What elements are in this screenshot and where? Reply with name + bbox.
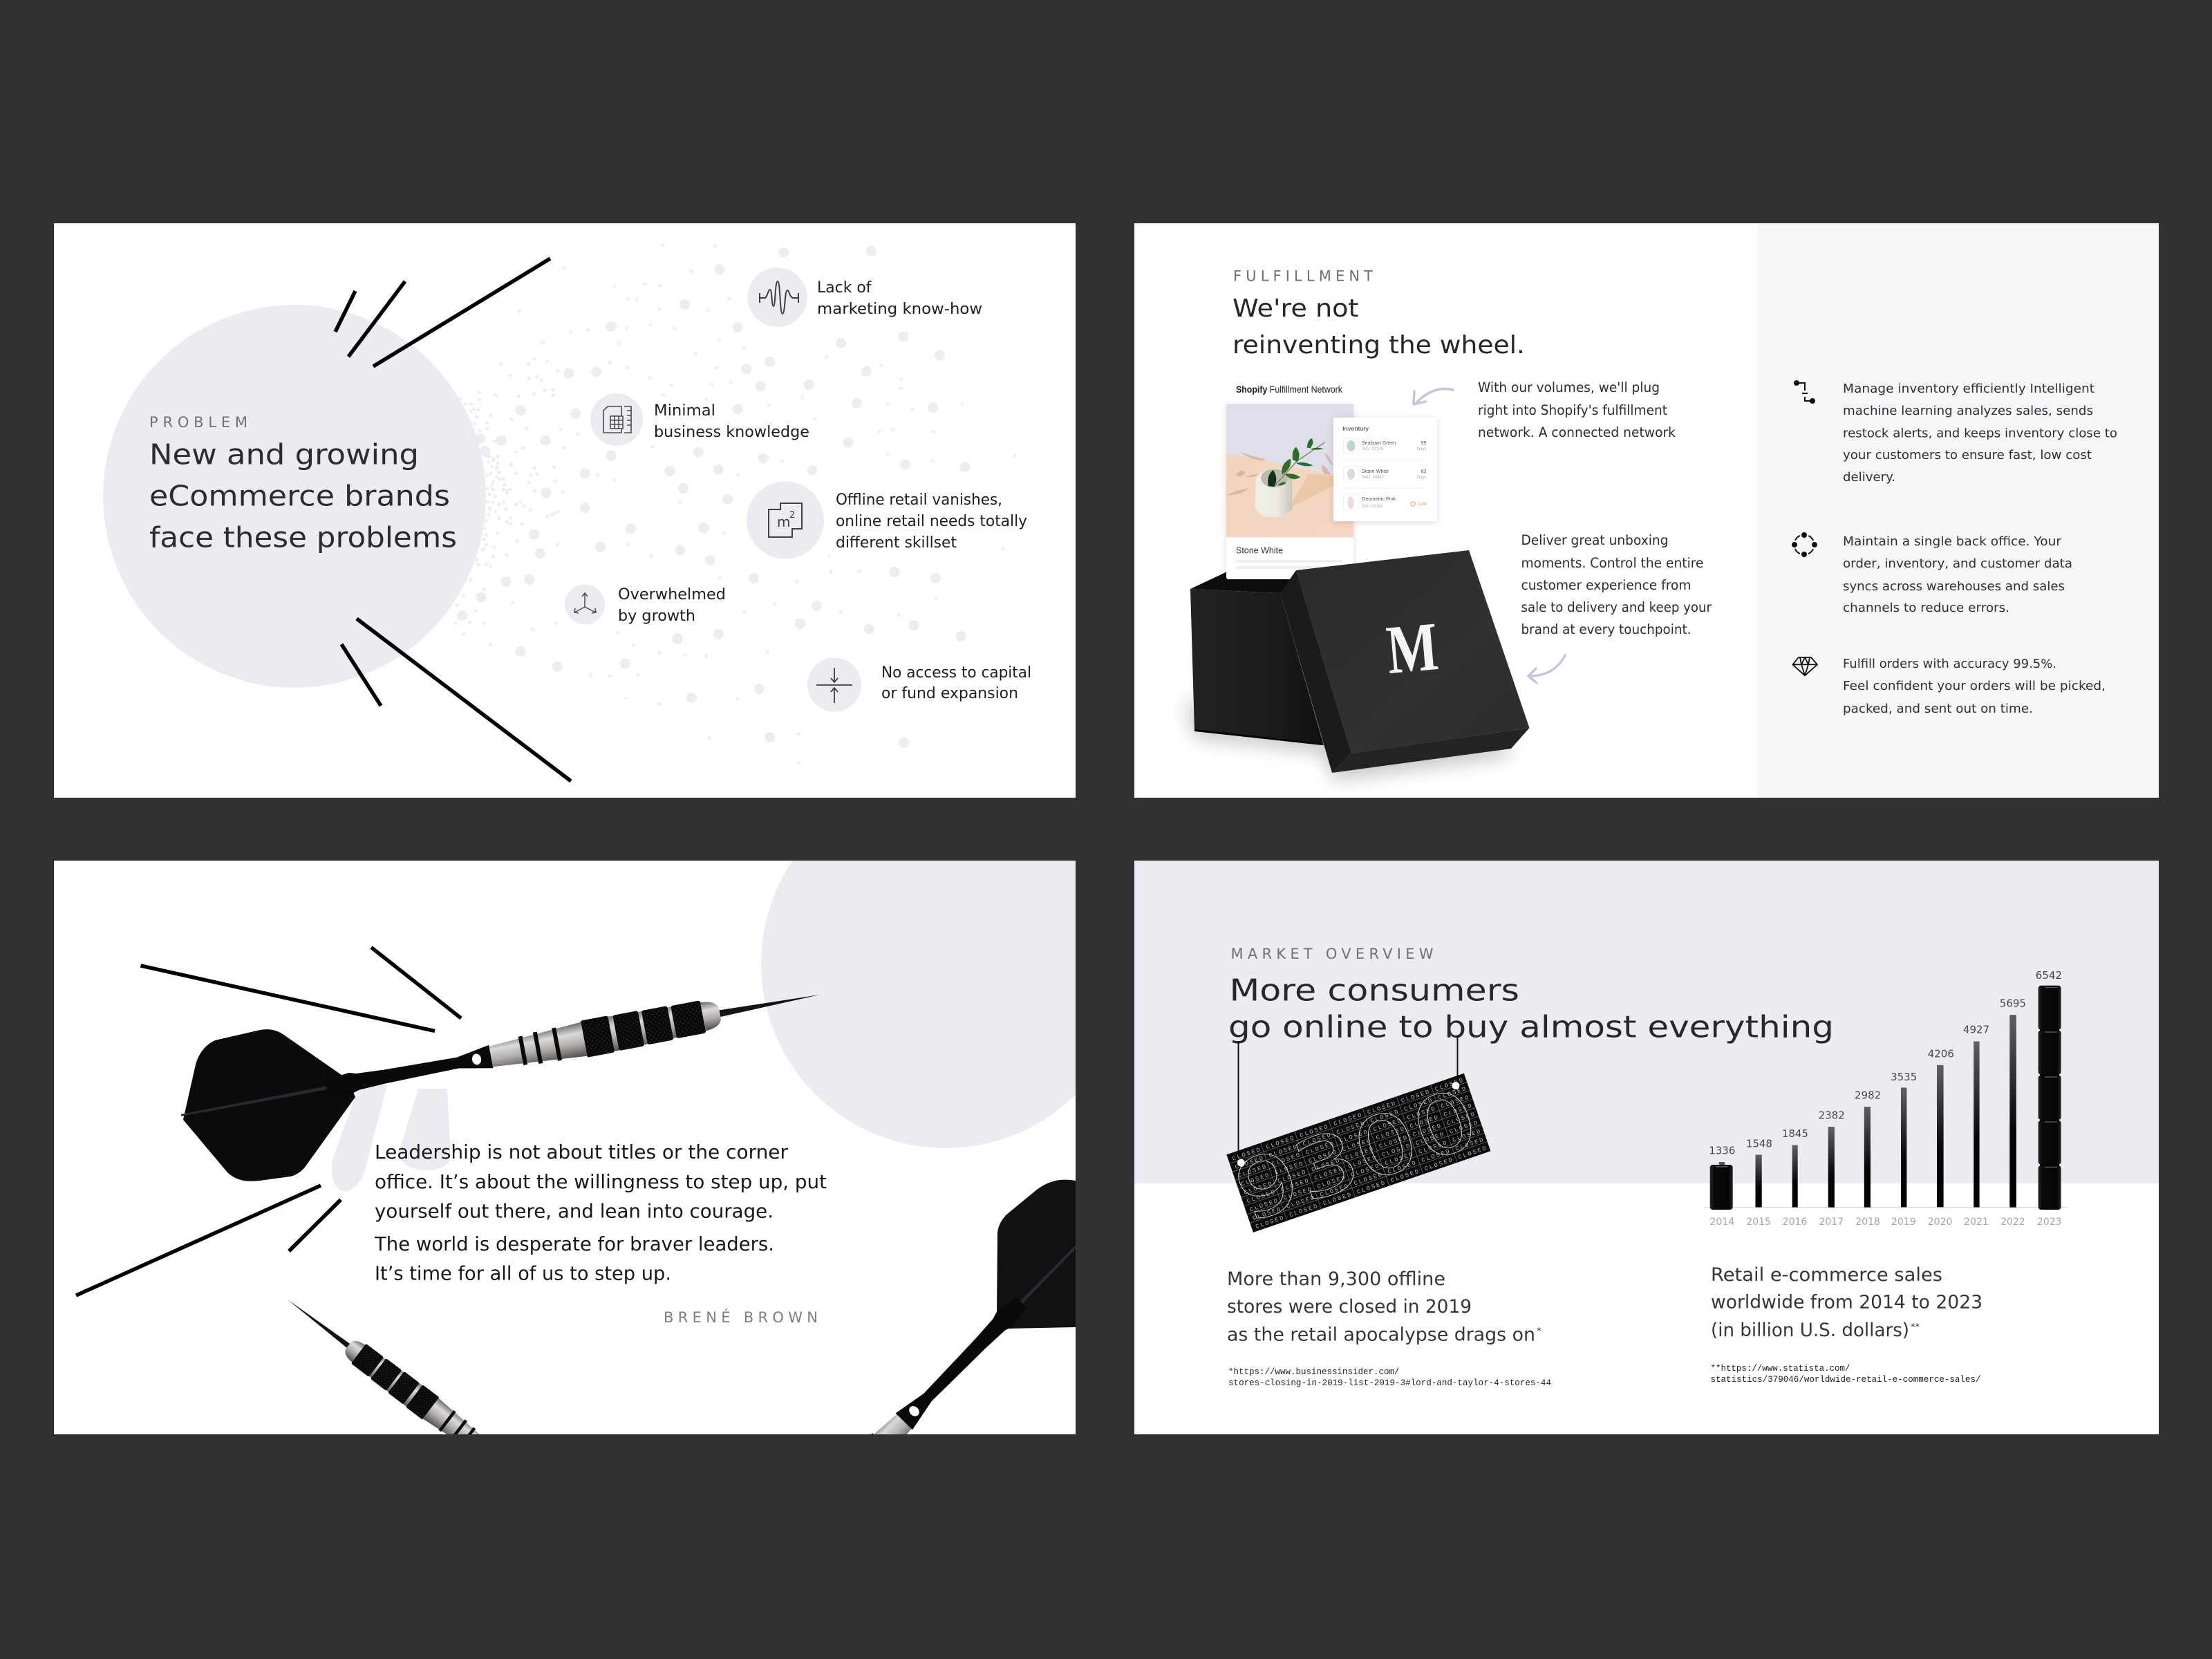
heading: market overview: More consumers: [1229, 973, 1519, 1008]
value labels: 1336: [1709, 1145, 1735, 1157]
text: stores closed: stores were closed in 2019: [1227, 1296, 1472, 1318]
text: deliver great unboxing: sale to delivery and keep your: [1521, 599, 1712, 615]
row: geometric pink: SKU: 03154: [1362, 505, 1383, 509]
year labels: [1709, 1217, 2062, 1228]
hanging strings: [1239, 1035, 1457, 1161]
heading: problem: New and growing: [149, 438, 419, 471]
value labels: 4927: [1963, 1024, 1989, 1036]
value labels: [1709, 969, 2062, 1157]
item: lack of marketing know-how: Lack of: [817, 279, 872, 297]
row: geometric pink: Geometric Pink: [1362, 497, 1396, 502]
text: retail sales: Retail e-commerce sales: [1711, 1264, 1942, 1286]
sign: 9300 closed stores: CLOSED CLOSED CLOSED CLOSED CLOSED CLOSED CLOSED: [1255, 1145, 1487, 1230]
dart: main: [178, 976, 823, 1181]
icon: calculator: [603, 406, 631, 433]
quote text: Leadership is not about titles or the corner: [375, 1141, 789, 1163]
value labels: 2382: [1819, 1109, 1845, 1122]
row: seafoam green: Days: [1417, 447, 1427, 451]
heading: market overview: go online to buy almost everything: [1228, 1009, 1834, 1045]
heading: problem: eCommerce brands: [149, 480, 450, 513]
box interior: [1190, 568, 1300, 593]
year labels: 2016: [1783, 1217, 1807, 1228]
text: deliver great unboxing: [1521, 532, 1712, 637]
quote author: BRENÉ BROWN: [664, 1309, 818, 1326]
feature: inventory: your customers to ensure fast, low cost: [1843, 448, 2092, 462]
footnote: statista: **https://www.statista.com/: [1710, 1364, 1850, 1374]
text: with our volumes: With our volumes, we'll plug: [1478, 379, 1660, 395]
sign: 9300 closed stores: CLOSED CLOSED CLOSED CLOSED CLOSED CLOSED CLOSED: [1235, 1085, 1467, 1171]
heading: problem: face these problems: [149, 521, 457, 554]
row: stone white: 62: [1421, 469, 1427, 474]
panel: market overview: [1134, 861, 2159, 1434]
feature: accuracy: Feel confident your orders will be picked,: [1843, 679, 2106, 693]
feature: inventory: delivery.: [1843, 470, 1895, 485]
eyebrow: market overview: MARKET OVERVIEW: [1230, 946, 1434, 962]
text: retail sales: (in billion U.S. dollars): [1711, 1320, 1909, 1341]
year labels: 2020: [1928, 1217, 1952, 1228]
text: retail sales: worldwide from 2014 to 2023: [1711, 1291, 1983, 1313]
dart: right: [871, 1179, 1076, 1434]
footnote: statista: [1710, 1364, 1981, 1385]
item: no access to capital: or fund expansion: [881, 685, 1018, 702]
corner circle: [761, 861, 1076, 1148]
footnote: statista: statistics/379046/worldwide-retail-e-commerce-sales/: [1710, 1375, 1981, 1385]
feature: back office: Maintain a single back office. Your: [1843, 534, 2062, 549]
item: lack of marketing know-how: marketing know-how: [817, 301, 982, 318]
row: seafoam green: [1344, 438, 1427, 453]
sign: 9300 closed stores: 9300: [1222, 1070, 1490, 1241]
text: deliver great unboxing: brand at every touchpoint.: [1521, 621, 1691, 637]
footnote: business insider: *https://www.businessinsider.com/: [1228, 1367, 1399, 1377]
feature: back office: syncs across warehouses and sales: [1843, 579, 2065, 594]
product card: [1226, 404, 1353, 579]
text: with our volumes: [1478, 379, 1676, 440]
item: offline retail vanishes: different skillset: [836, 534, 957, 552]
quote text: yourself out there, and lean into courage.: [375, 1200, 774, 1222]
heading: fulfillment: We're not: [1232, 294, 1359, 323]
heading: fulfillment: reinventing the wheel.: [1232, 331, 1525, 359]
row: stone white: Stone White: [1362, 469, 1389, 474]
eyebrow: fulfillment: FULFILLMENT: [1233, 268, 1373, 285]
bars: [1756, 1015, 2016, 1208]
value labels: 1845: [1782, 1127, 1808, 1140]
icon: floor plan m2: 2: [789, 510, 795, 521]
label: shopify network: Shopify Fulfillment Network: [1236, 384, 1343, 395]
heading: fulfillment: [1232, 294, 1525, 359]
year labels: 2023: [2037, 1217, 2062, 1228]
panel: fulfillment: [1134, 223, 2159, 798]
row: seafoam green: 95: [1421, 441, 1427, 446]
eyebrow: problem: PROBLEM: [149, 414, 247, 431]
year labels: 2015: [1746, 1217, 1771, 1228]
row: stone white: SKU: 03432: [1362, 476, 1385, 480]
arrow: to box: [1528, 655, 1565, 683]
text: stores closed: More than 9,300 offline: [1227, 1268, 1445, 1290]
sign: 9300 closed stores: CLOSED CLOSED CLOSED CLOSED CLOSED CLOSED CLOSED: [1240, 1103, 1472, 1188]
icon: waveform: [760, 281, 798, 314]
icon: three arrows: [574, 593, 596, 613]
sign: 9300 closed stores: CLOSED CLOSED CLOSED CLOSED CLOSED CLOSED CLOSED: [1237, 1094, 1470, 1179]
bar chart: [1704, 969, 2068, 1228]
item: overwhelmed by growth: [565, 585, 726, 625]
sign: 9300 closed stores: CLOSED CLOSED CLOSED CLOSED CLOSED CLOSED CLOSED: [1231, 1077, 1464, 1163]
panel: quote: [54, 861, 1076, 1434]
row: geometric pink: [1344, 495, 1427, 510]
burst lines: [335, 259, 571, 781]
arrow: to inventory: [1414, 388, 1453, 404]
row: stone white: Days: [1417, 476, 1427, 480]
feature: inventory: restock alerts, and keeps inventory close to: [1843, 426, 2117, 441]
item: minimal business knowledge: business knowledge: [654, 424, 809, 441]
icon: compress arrows: [816, 668, 852, 703]
icon: route: [1794, 380, 1815, 404]
quote text: The world is desperate for braver leaders.: [374, 1233, 774, 1255]
text: deliver great unboxing: Deliver great unboxing: [1521, 532, 1669, 548]
axis: [1704, 1207, 2068, 1208]
quote text: office. It’s about the willingness to step up, put: [375, 1171, 827, 1193]
footnote: business insider: [1228, 1367, 1551, 1388]
year labels: 2022: [2000, 1217, 2025, 1228]
text: stores closed: [1227, 1268, 1541, 1345]
year labels: 2019: [1891, 1217, 1916, 1228]
can: 2014: [1710, 1162, 1733, 1210]
feature: accuracy: [1792, 657, 2106, 716]
dart: bottom: [288, 1300, 480, 1434]
gift box: [1190, 550, 1529, 773]
value labels: 1548: [1746, 1138, 1772, 1150]
quote text: It’s time for all of us to step up.: [375, 1262, 671, 1284]
text: retail sales: [1711, 1264, 1983, 1341]
burst lines: [76, 947, 461, 1295]
item: lack of marketing know-how: [748, 268, 982, 327]
feature: inventory: Manage inventory efficiently Intelligent: [1843, 382, 2094, 396]
text: deliver great unboxing: moments. Control the entire: [1521, 555, 1703, 571]
item: no access to capital: [807, 658, 1031, 712]
quotation mark: [332, 1085, 451, 1191]
row: geometric pink: Low: [1418, 502, 1427, 507]
sign: 9300 closed stores: CLOSED CLOSED CLOSED CLOSED CLOSED CLOSED CLOSED: [1243, 1111, 1475, 1197]
sign: 9300 closed stores: CLOSED CLOSED CLOSED CLOSED CLOSED CLOSED CLOSED: [1252, 1136, 1484, 1222]
item: overwhelmed by growth: by growth: [618, 608, 695, 625]
value labels: 6542: [2036, 969, 2062, 982]
product photo: [1226, 404, 1353, 537]
feature: inventory: [1794, 380, 2117, 485]
heading: problem: [149, 438, 457, 554]
text: stores closed: *: [1537, 1327, 1541, 1337]
value labels: 4206: [1928, 1047, 1954, 1060]
row: seafoam green: Seafoam Green: [1362, 441, 1396, 446]
row: stone white: [1344, 467, 1427, 482]
feature: inventory: machine learning analyzes sales, sends: [1843, 404, 2093, 418]
year labels: 2018: [1855, 1217, 1880, 1228]
icon: ring of dots: [1792, 532, 1817, 557]
value labels: 5695: [2000, 997, 2026, 1010]
item: offline retail vanishes: [747, 481, 1027, 559]
item: no access to capital: No access to capital: [881, 664, 1031, 682]
row: seafoam green: SKU: 02145: [1362, 447, 1384, 451]
icon: floor plan m2: [769, 503, 802, 537]
sign: 9300 closed stores: CLOSED CLOSED CLOSED CLOSED CLOSED CLOSED CLOSED: [1249, 1128, 1481, 1213]
footnote: business insider: stores-closing-in-2019-list-2019-3#lord-and-taylor-4-stores-44: [1228, 1378, 1551, 1388]
year labels: 2014: [1709, 1217, 1734, 1228]
item: overwhelmed by growth: Overwhelmed: [618, 586, 726, 603]
text: with our volumes: network. A connected network: [1478, 424, 1676, 440]
product card: Stone White: [1236, 545, 1283, 556]
feature: back office: channels to reduce errors.: [1843, 601, 2009, 615]
big circle: [103, 305, 486, 688]
sign: 9300 closed stores: CLOSED CLOSED CLOSED CLOSED CLOSED CLOSED CLOSED: [1246, 1120, 1479, 1205]
item: minimal business knowledge: Minimal: [654, 402, 715, 420]
text: with our volumes: right into Shopify's fulfillment: [1478, 402, 1667, 418]
inventory card: Inventory: [1342, 425, 1369, 432]
item: minimal business knowledge: [590, 393, 809, 446]
value labels: 2982: [1855, 1089, 1881, 1102]
inventory card: [1333, 418, 1437, 521]
icon: floor plan m2: m: [777, 514, 790, 530]
text: deliver great unboxing: customer experience from: [1521, 577, 1691, 593]
text: retail sales: **: [1911, 1322, 1920, 1333]
feature: accuracy: packed, and sent out on time.: [1843, 702, 2033, 716]
text: stores closed: as the retail apocalypse drags on: [1227, 1324, 1535, 1345]
feature: back office: [1792, 532, 2072, 615]
item: offline retail vanishes: online retail needs totally: [836, 513, 1027, 530]
heading: market overview: [1228, 973, 1834, 1045]
box shadow: [1186, 698, 1514, 780]
year labels: 2021: [1964, 1217, 1989, 1228]
can stack: 2023: [2038, 986, 2061, 1210]
year labels: 2017: [1819, 1217, 1844, 1228]
item: offline retail vanishes: Offline retail vanishes,: [836, 491, 1002, 509]
value labels: 3535: [1891, 1071, 1917, 1083]
icon: diamond: [1792, 657, 1817, 675]
panel: problem: [54, 223, 1076, 798]
feature: accuracy: Fulfill orders with accuracy 99.5%.: [1843, 657, 2056, 671]
feature: back office: order, inventory, and customer data: [1843, 556, 2072, 571]
box logo: M: [1383, 608, 1441, 688]
dot scatter background: [456, 245, 1015, 762]
quote text: [374, 1141, 827, 1284]
